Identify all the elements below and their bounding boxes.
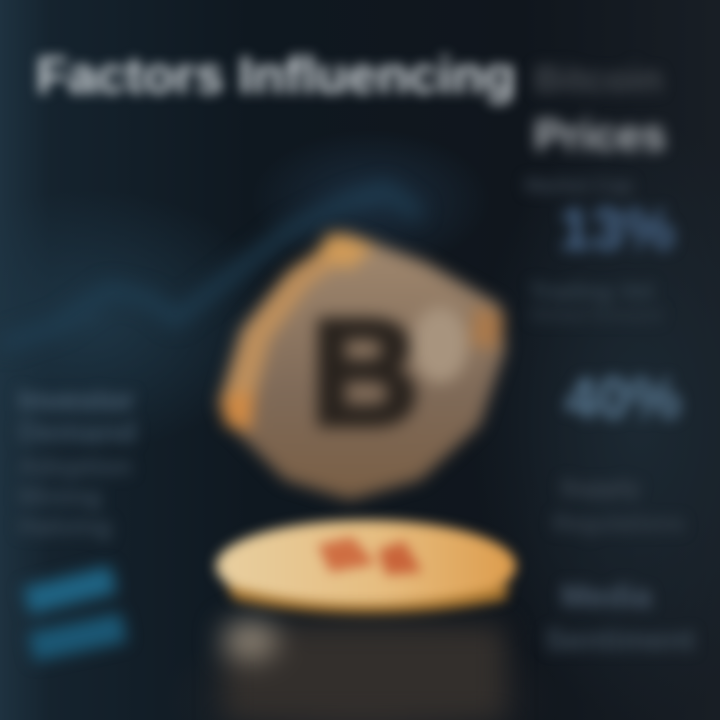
right column stats bbox=[524, 175, 696, 657]
coin body bbox=[218, 232, 505, 500]
right column stats: Regulations bbox=[553, 510, 685, 536]
right column stats: Global Demand bbox=[530, 305, 662, 325]
left button bars bbox=[16, 558, 134, 668]
right column stats: Supply bbox=[560, 475, 640, 502]
reflection bbox=[206, 604, 514, 720]
stat three: Media bbox=[561, 578, 652, 614]
title: second part bbox=[526, 59, 672, 160]
stat two: 40% bbox=[565, 366, 681, 431]
title: second part: Bitcoin bbox=[534, 59, 663, 101]
title: Factors Influencing bbox=[36, 47, 516, 105]
right column stats: Market Cap bbox=[525, 175, 633, 197]
title: second part: Prices bbox=[534, 111, 666, 160]
price chart line bbox=[18, 181, 422, 340]
left column text: Demand bbox=[18, 416, 136, 449]
right column stats: Sentiment bbox=[545, 622, 695, 657]
left column text: Adoption bbox=[18, 451, 132, 481]
coin base bbox=[207, 510, 525, 622]
left column text: Halving bbox=[18, 511, 112, 541]
main coin bbox=[208, 222, 515, 509]
stat one: 13% bbox=[559, 197, 675, 262]
right column stats: Trading Vol bbox=[530, 278, 654, 304]
left column text: Mining bbox=[18, 481, 102, 511]
bitcoin symbol: B bbox=[311, 288, 419, 456]
left column text: Investor bbox=[18, 384, 135, 417]
orange markings bbox=[318, 537, 376, 572]
left column text bbox=[16, 384, 139, 541]
